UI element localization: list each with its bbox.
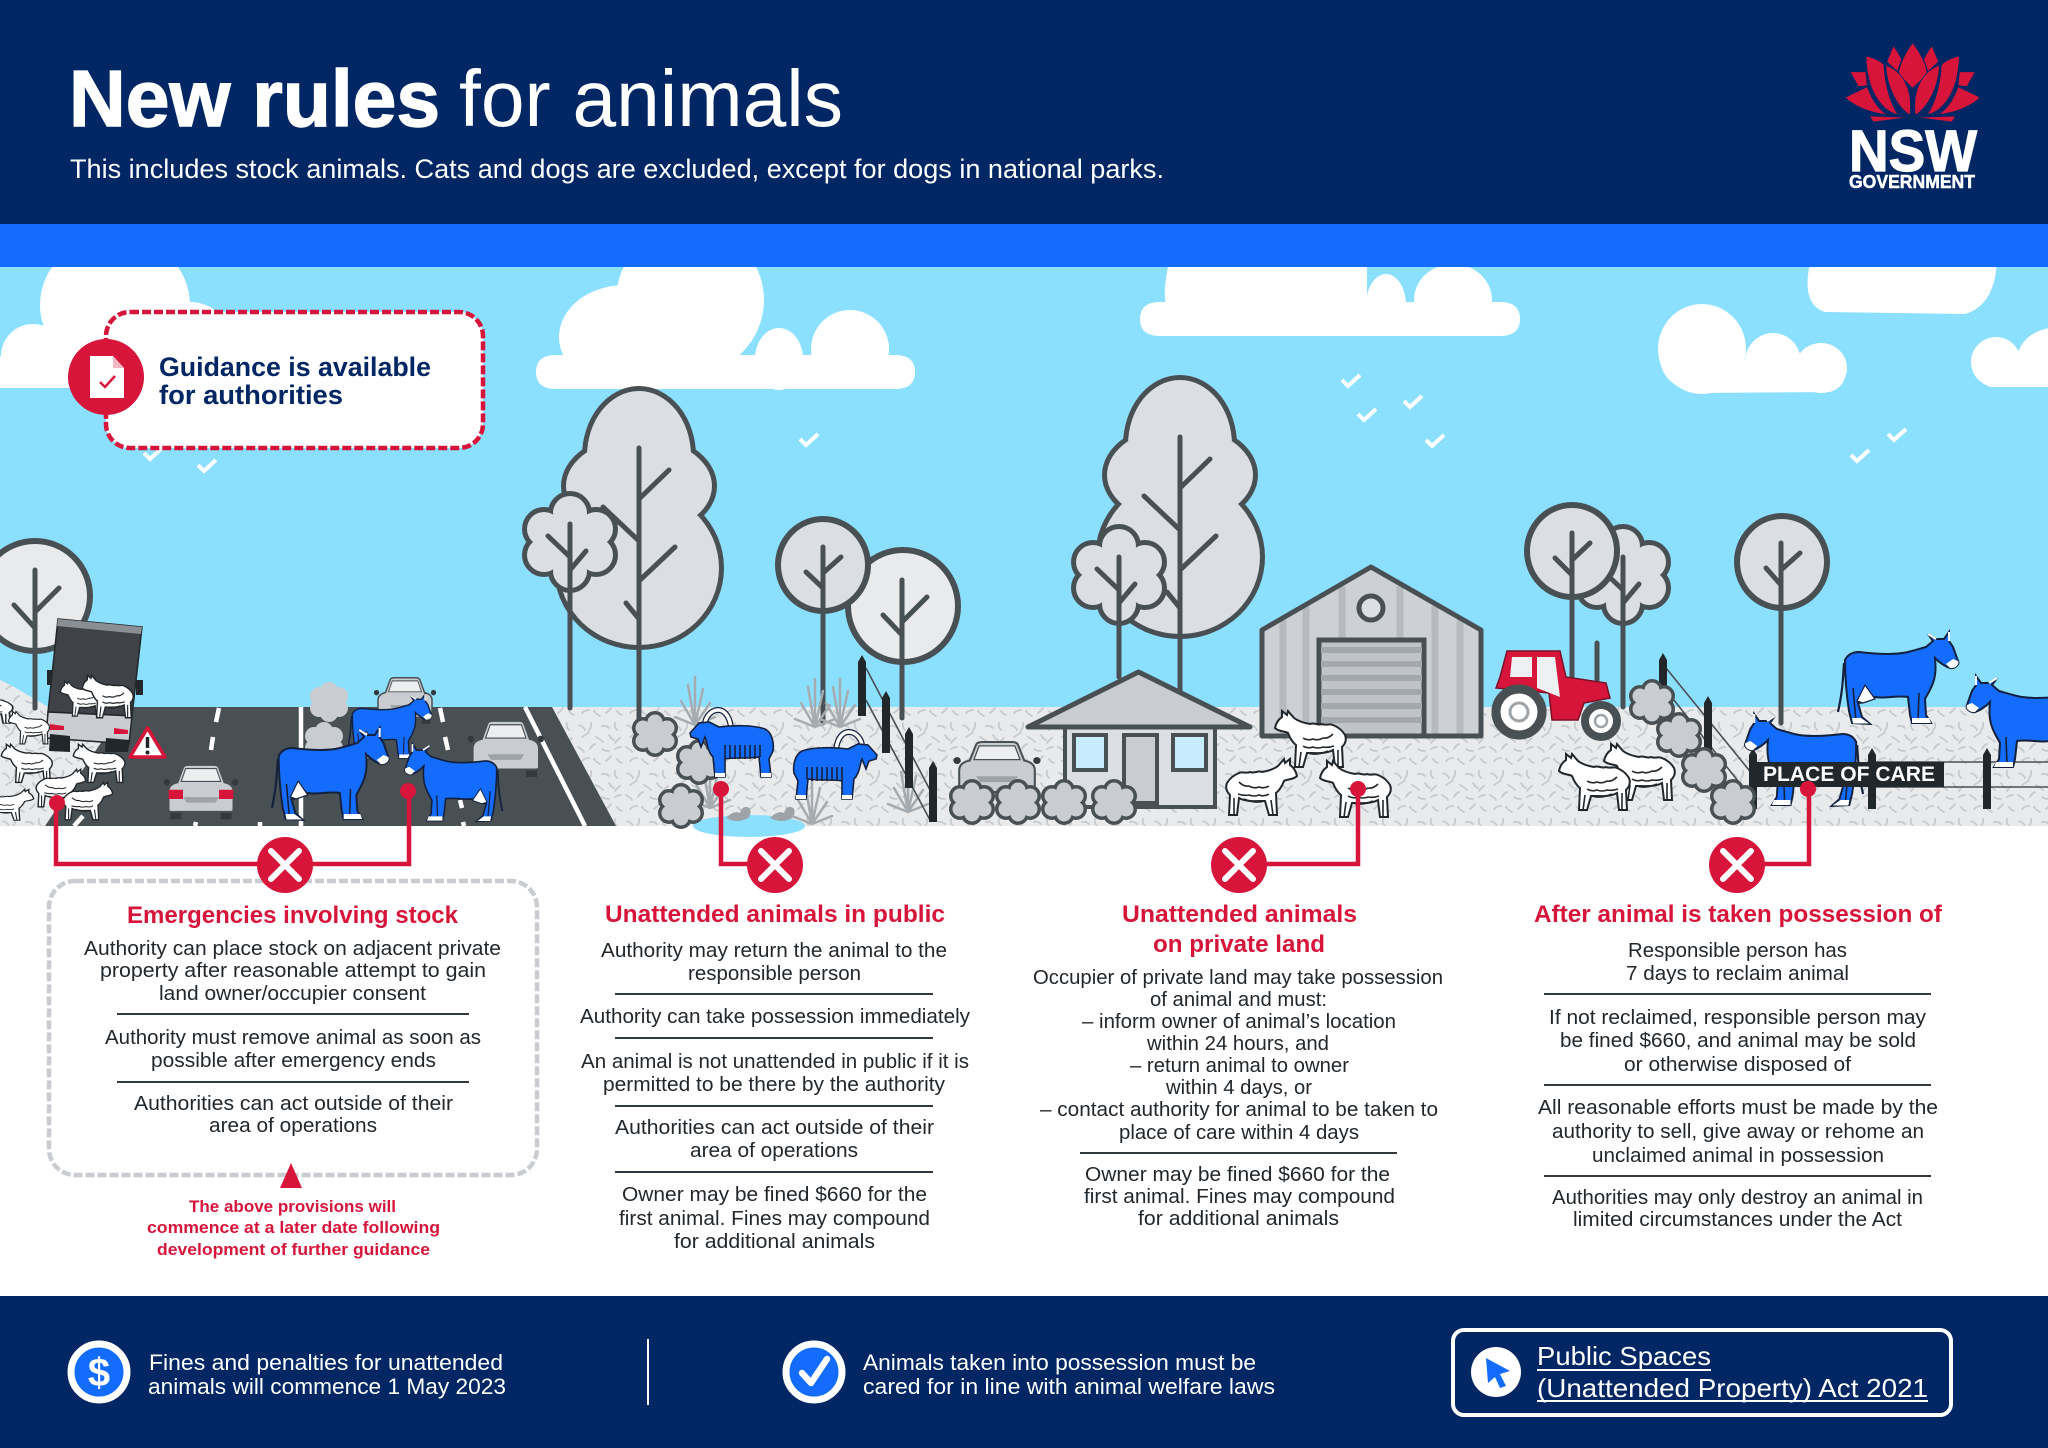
blue cows on road [272,694,502,821]
sheep group right [1559,744,1675,810]
fines note: Fines and penalties for unattended [149,1350,503,1375]
panel text: If not reclaimed, responsible person may [1549,1006,1927,1029]
barn [1262,567,1481,736]
icon: document check [68,339,144,415]
connector line [1239,781,1366,864]
guidance text: for authorities [159,380,343,410]
NSW Government logo: GOVERNMENT [1849,172,1975,192]
icon: red cross [257,837,313,893]
panel text: possible after emergency ends [151,1049,436,1072]
illustrated scene [0,224,2048,837]
link box: legislation [1453,1330,1951,1415]
title: New rules [69,54,440,143]
trees [0,380,1827,731]
panel text: be fined $660, and animal may be sold [1560,1029,1916,1052]
car at house [953,742,1041,800]
panel text: Authority may return the animal to the [601,939,947,962]
truck [46,619,143,752]
welfare note: Animals taken into possession must be [863,1350,1256,1375]
panel text: for additional animals [674,1230,875,1253]
panel text: Authorities may only destroy an animal in [1552,1186,1923,1209]
panel: unattended animals on private land [1033,781,1443,1230]
commencement note [147,1197,440,1259]
heading: Unattended animals [1122,901,1357,928]
light bushes behind road [305,682,348,762]
bushes left [636,714,718,826]
panel text: area of operations [209,1114,377,1137]
panel text: Occupier of private land may take possession [1033,966,1443,989]
panel text: – return animal to owner [1130,1054,1349,1077]
panel text: place of care within 4 days [1119,1121,1359,1144]
guidance text: Guidance is available [159,352,431,382]
warning sign [130,728,165,757]
panel text: Authority can take possession immediately [580,1005,971,1028]
fines note [148,1350,506,1399]
panel text: land owner/occupier consent [159,982,426,1005]
heading: After animal is taken possession of [1534,901,1943,928]
panel text: All reasonable efforts must be made by the [1538,1096,1938,1119]
birds [144,375,1906,471]
tractor [1494,643,1617,737]
panel text [580,939,971,1253]
fence right [1659,653,2048,809]
NSW Government logo: NSW [1849,119,1977,184]
panel text: – inform owner of animal’s location [1082,1010,1396,1033]
title [69,54,843,143]
pond with ducks [693,807,805,837]
panel text: An animal is not unattended in public if it is [581,1050,969,1073]
panel text: Authorities can act outside of their [134,1092,453,1115]
icon: red cross [747,837,803,893]
panel text: Authorities can act outside of their [615,1116,934,1139]
commencement note: The above provisions will [189,1197,396,1216]
link text: Public Spaces [1537,1341,1711,1371]
panel text: first animal. Fines may compound [1084,1185,1395,1208]
panel text: Responsible person has [1628,939,1847,962]
heading: Emergencies involving stock [127,902,458,929]
blue goats [690,710,877,799]
grass tufts [675,677,928,824]
house [1028,672,1250,807]
title: for animals [459,54,843,143]
footer [0,1296,2048,1448]
road [45,707,616,826]
connector line [1737,781,1816,864]
icon: check [786,1344,842,1400]
panel: after animal is taken possession of [1534,781,1943,1231]
icon: red cross [1211,837,1267,893]
back car on road [374,678,436,724]
panel text: or otherwise disposed of [1624,1053,1851,1076]
panel text: Authority must remove animal as soon as [105,1026,481,1049]
clouds [0,226,2048,394]
fines note: animals will commence 1 May 2023 [148,1374,506,1399]
panel text: for additional animals [1138,1207,1339,1230]
sky [0,267,2048,708]
sheep group centre [1226,711,1391,817]
heading: on private land [1153,931,1325,958]
header band [0,0,2048,224]
ground [0,680,2048,826]
panel text [1538,939,1938,1231]
panel text: unclaimed animal in possession [1592,1144,1884,1167]
panel text: responsible person [688,962,861,985]
welfare note: cared for in line with animal welfare laws [863,1374,1275,1399]
panel text: Owner may be fined $660 for the [622,1183,927,1206]
sheep group left [0,692,125,820]
panel text: Authority can place stock on adjacent private [84,937,501,960]
panel text: permitted to be there by the authority [603,1073,946,1096]
bushes right [1632,682,1752,822]
panel text: of animal and must: [1150,988,1327,1011]
commencement note: development of further guidance [157,1240,430,1259]
callout: guidance for authorities [68,312,483,448]
blue band [0,224,2048,267]
panel text: – contact authority for animal to be taken to [1040,1098,1438,1121]
icon: red cross [1709,837,1765,893]
fence middle [858,655,937,822]
icon: dollar: $ [88,1351,110,1395]
panel text: limited circumstances under the Act [1573,1208,1902,1231]
subtitle: This includes stock animals. Cats and dogs are excluded, except for dogs in national parks. [70,154,1164,184]
panel text: within 24 hours, and [1146,1032,1329,1055]
connector lines [49,783,416,864]
NSW Government logo [1845,43,1980,192]
panel: unattended animals in public [580,781,971,1253]
icon: cursor [1471,1347,1521,1397]
heading [1122,901,1357,958]
panel text: first animal. Fines may compound [619,1207,930,1230]
commencement note: commence at a later date following [147,1218,440,1237]
link text [1537,1341,1928,1403]
rear car on road [164,765,238,819]
panel text: area of operations [690,1139,858,1162]
icon: dollar [71,1344,127,1400]
blue cows right [1745,632,2048,806]
panel text: property after reasonable attempt to gain [100,959,486,982]
bushes at house [952,782,1134,822]
panel text: authority to sell, give away or rehome an [1552,1120,1924,1143]
guidance text [159,352,431,410]
front car on road [468,721,544,777]
panel text [1033,966,1443,1230]
welfare note [863,1350,1275,1399]
panel text: within 4 days, or [1165,1076,1312,1099]
panel text: 7 days to reclaim animal [1626,962,1849,985]
heading: Unattended animals in public [605,901,945,928]
icon: red triangle [280,1163,302,1188]
place of care sign: PLACE OF CARE [1763,763,1935,786]
panel: emergencies involving stock [49,783,537,1259]
connector line [713,781,775,864]
panel text: Owner may be fined $660 for the [1085,1163,1390,1186]
link text: (Unattended Property) Act 2021 [1537,1373,1928,1403]
panel text [84,937,501,1137]
